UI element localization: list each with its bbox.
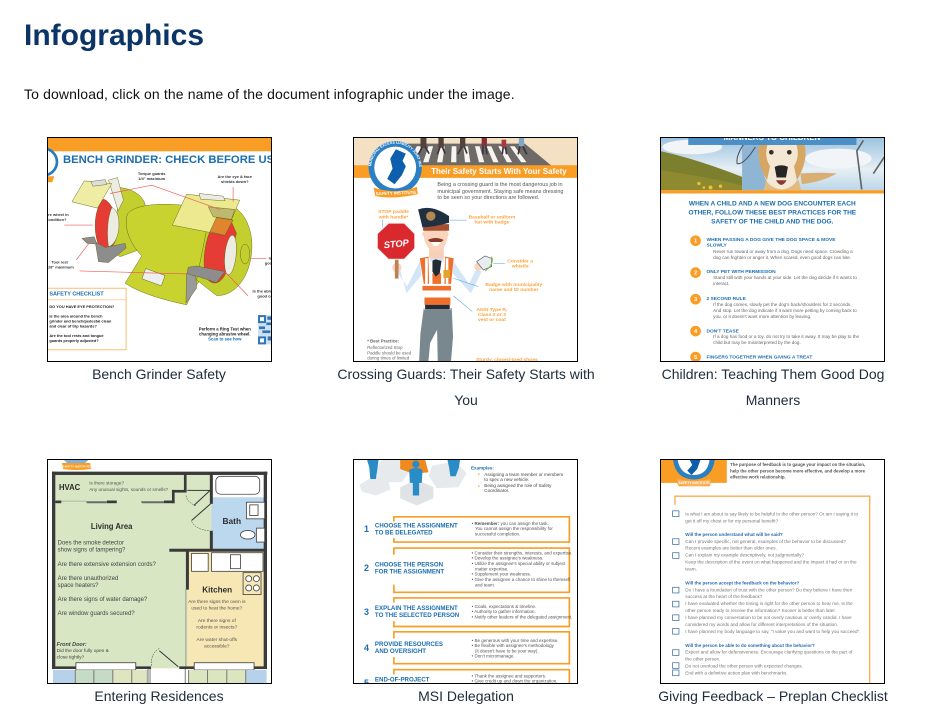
panel: crossing guards thumbnail	[353, 137, 578, 362]
panel: safety checklist: and clear of trip hazards?	[49, 323, 97, 328]
step 3: • Notify other leaders of the delegated assignment.	[472, 615, 573, 620]
step 2: • Supplement your weakness.	[472, 572, 531, 577]
ring test note: Perform a Ring Test when	[199, 326, 251, 331]
step 2: matter expertise.	[475, 566, 508, 571]
step 2: CHOOSE THE PERSON	[375, 561, 444, 568]
step 2: ONLY PET WITH PERMISSION	[707, 269, 776, 275]
caption: crossing guards: Crossing Guards: Their Safety Starts with	[337, 366, 595, 382]
living area questions: Are there extensive extension cords?	[58, 562, 157, 568]
orange header band	[48, 138, 271, 151]
step 1: WHEN PASSING A DOG GIVE THE DOG SPACE & MOVE	[707, 237, 836, 243]
panel: safety checklist: Are the tool rests and tongue	[49, 333, 104, 338]
step 4: AND OVERSIGHT	[375, 648, 426, 655]
checklist text: get it off my chest or for my personal benefit?	[685, 518, 778, 523]
logo: safety institute badge	[368, 141, 422, 198]
step 5	[364, 670, 569, 692]
step 5	[690, 352, 812, 362]
caption: crossing guards	[337, 366, 595, 408]
best practice note: Paddle should be used	[367, 350, 412, 355]
section headings	[685, 532, 815, 648]
kitchen questions	[188, 599, 246, 649]
logo: safety institute badge: SAFETY INSTITUTE	[376, 190, 416, 196]
heading: best practices: WHEN A CHILD AND A NEW DOG ENCOUNTER EACH	[689, 200, 856, 207]
caption: dog manners: Manners	[746, 392, 800, 408]
step 4: (it doesn't have to be your way).	[475, 648, 539, 653]
orange title band	[353, 165, 577, 178]
intro paragraph: Being a crossing guard is the most dangerous job in	[437, 182, 563, 188]
step 5: 5	[694, 355, 697, 361]
orange frame	[675, 496, 870, 683]
banner title	[688, 133, 856, 145]
kitchen questions: rodents or insects?	[196, 624, 238, 630]
step 1: 1	[694, 239, 697, 245]
step 3: • Authority to gather information.	[472, 609, 536, 614]
step 2: and team.	[475, 582, 495, 587]
step 2: 2	[694, 271, 697, 277]
step 2	[690, 267, 857, 286]
step 3: 2 SECOND RULE	[707, 296, 747, 302]
photo: dog and owner	[660, 138, 884, 190]
room labels: Kitchen	[202, 584, 232, 594]
orange callout labels: name and ID number	[489, 287, 538, 293]
logo on orange block	[661, 460, 727, 486]
step 3	[690, 294, 857, 319]
front door note	[57, 642, 110, 660]
step 5: • Thank the assignee and supporters.	[472, 673, 546, 678]
panel: feedback preplan checklist thumbnail	[660, 459, 885, 684]
examples list: Coordinator.	[484, 488, 509, 493]
step 4: If a dog has food or a toy, do not try to take it away. It may be play to the	[713, 334, 860, 339]
callout labels: Are the eye & face	[218, 174, 253, 179]
step 3: If the dog comes, slowly pet the dog's back/shoulders for 2 seconds.	[713, 302, 851, 307]
step 2: Stand still with your hands at your side. Let the dog decide if it wants to	[713, 275, 857, 280]
living area questions: Are there unauthorized	[58, 576, 118, 582]
step 3: And stop. Let the dog indicate if it want more petting by coming back to	[713, 308, 857, 313]
checklist text: team.	[685, 567, 697, 572]
checklist text: success at the heart of the feedback?	[685, 594, 763, 599]
ring test note: changing abrasive wheel.	[199, 331, 251, 336]
checklist text: I have planned my body language to say, "I value you and want to help you succeed".	[685, 629, 861, 634]
arms	[397, 260, 482, 293]
step 3: TO THE SELECTED PERSON	[375, 612, 460, 619]
step 1: dog can frighten or anger it. When scared, even good dogs can bite.	[713, 255, 851, 260]
panel: safety checklist	[48, 288, 126, 350]
orange callout labels: Consider a	[507, 258, 533, 264]
best practice note: during times of limited	[367, 356, 410, 361]
title: Infographics	[24, 19, 204, 52]
checklist text: Recent examples are better than older ones.	[685, 546, 777, 551]
checklist text: Can I provide specific, not general, examples of the behavior to be discussed?	[685, 539, 846, 544]
callout leader lines	[383, 219, 505, 311]
HVAC questions	[89, 481, 169, 492]
intro text: To download, click on the name of the document infographic under the image.	[24, 86, 515, 102]
section headings: Will the person understand what will be said?	[685, 532, 783, 537]
front door note: Did the door fully open &	[57, 648, 110, 654]
panel: safety checklist: SAFETY CHECKLIST	[49, 292, 104, 298]
panel: bench grinder safety thumbnail	[47, 137, 272, 362]
logo on orange block: SAFETY INSTITUTE	[678, 481, 710, 485]
checklist text: considered my words and allow for different interpretations of the situation.	[685, 622, 838, 627]
step 4: DON'T TEASE	[707, 328, 740, 334]
best practice note	[367, 339, 412, 361]
step 1: TO BE DELEGATED	[375, 529, 433, 536]
room labels	[59, 482, 241, 594]
trousers	[419, 308, 453, 361]
callout labels: Torque guards	[138, 171, 166, 176]
purpose paragraph: help the other person become more effective, and develop a more	[730, 468, 866, 473]
intro paragraph: municipal government. Staying safe means dressing	[437, 189, 563, 195]
step 2: • Consider their strengths, interests, and expertise.	[472, 550, 573, 555]
icon: whistle	[477, 256, 492, 271]
illustration: crossing guard	[392, 208, 482, 361]
section headings: Will the person accept the feedback on the behavior?	[685, 581, 799, 586]
kitchen questions: used to heat the home?	[191, 606, 243, 612]
room labels: Living Area	[91, 521, 133, 531]
intro paragraph: to be seen so your directions are followed.	[437, 195, 540, 201]
step 2: • Develop the assignee's weakness.	[472, 556, 543, 561]
icon: partial logo	[30, 149, 57, 182]
orange callout labels: Class 2 or 3	[478, 312, 506, 318]
step 4	[364, 632, 569, 664]
step 4: child but may be misinterpreted by the dog.	[713, 340, 801, 345]
purpose paragraph: The purpose of feedback is to gauge your impact on the situation,	[730, 462, 865, 467]
checklist text	[685, 512, 861, 675]
checklist text: Expect and allow for defensiveness. Encourage clarifying questions on the part of	[685, 649, 853, 654]
step 4: • Don't micromanage.	[472, 654, 515, 659]
panel: safety checklist: DO YOU HAVE EYE PROTECTION?	[49, 304, 115, 309]
HVAC questions: Any unusual sights, sounds or smells?	[89, 487, 169, 492]
checklist text: End with a definitive action plan with benchmarks.	[685, 670, 788, 675]
ring test note	[199, 326, 251, 341]
heading: their safety: Their Safety Starts With Your Safety	[431, 167, 567, 176]
head	[429, 243, 444, 258]
kitchen questions: Are there signs the oven is	[188, 599, 246, 605]
icon: QR code	[258, 315, 271, 344]
kitchen fixtures	[192, 553, 263, 595]
panel: MSI delegation thumbnail	[353, 459, 578, 684]
checklist text: I have planned my conversation to be not overly cautious or overly candid. I have	[685, 615, 852, 620]
step 2: • Give the assignee a chance to shine to themself	[472, 577, 571, 582]
living area questions: space heaters?	[58, 583, 99, 589]
step 2: interact.	[713, 281, 729, 286]
step 1: SLOWLY	[707, 243, 728, 249]
caption: giving feedback: Giving Feedback – Preplan Checklist	[658, 688, 888, 704]
callout labels: 1/4" maximum	[138, 176, 166, 181]
checklist text: Do not overload the other person with expected changes.	[685, 663, 803, 668]
step 3: 3	[364, 607, 369, 617]
caption: dog manners: Children: Teaching Them Good Dog	[662, 366, 884, 382]
heading: best practices	[689, 200, 857, 226]
illustration: grinder	[72, 178, 252, 305]
examples list: to spec a new vehicle.	[484, 477, 529, 482]
step 1: CHOOSE THE ASSIGNMENT	[375, 522, 458, 529]
step 5: FINGERS TOGETHER WHEN GIVING A TREAT	[707, 354, 812, 360]
checklist text: the other person.	[685, 656, 720, 661]
living area questions: Does the smoke detector	[58, 541, 124, 547]
callout arrows	[64, 185, 266, 296]
floor plan rooms	[54, 474, 266, 668]
panel: safety checklist: grinder and bench/pedestal clean	[49, 318, 112, 323]
callout labels: shields down?	[221, 179, 249, 184]
front door note: close tightly?	[57, 654, 85, 660]
step 4: • Be generous with your time and expertise.	[472, 638, 559, 643]
icon: stop sign: STOP	[383, 238, 410, 250]
step 1: • Remember: you can assign the task.	[472, 521, 549, 526]
caption: entering residences: Entering Residences	[94, 688, 224, 704]
step 4: PROVIDE RESOURCES	[375, 641, 443, 648]
street scene	[353, 138, 577, 166]
orange callout labels: vest or coat	[478, 317, 506, 323]
examples list	[471, 465, 564, 493]
caption: bench grinder safety: Bench Grinder Safety	[92, 366, 226, 382]
kitchen questions: Are water shut-offs	[197, 637, 238, 643]
step 3: you, or it doesn't want more attention by leaving.	[713, 314, 811, 319]
section headings: Will the person be able to do something about the behavior?	[685, 643, 815, 648]
step 1: Never run toward or away from a dog. Dogs need space. Crowding a	[713, 249, 853, 254]
examples list: Assigning a team member or members	[484, 472, 564, 477]
examples list: Being assigned the role of Safety	[484, 483, 552, 488]
orange callout labels: ANSI Type R,	[476, 307, 508, 313]
checklist text: Keep the description of the event on what happened and the impact it had or on the	[685, 560, 857, 565]
doors	[151, 491, 211, 667]
kitchen questions: accessible?	[204, 643, 230, 649]
checklist text: Do I have a foundation of trust with the other person? Do they believe I have their	[685, 587, 853, 592]
step 1: successful completion.	[475, 531, 520, 536]
step 3: 3	[694, 297, 697, 303]
step 2: • Utilize the assignee's special ability or subject	[472, 561, 566, 566]
best practice note: * Best Practice:	[367, 339, 399, 344]
illustration: people on hexagons	[359, 460, 467, 506]
orange callout labels: Badge with municipality	[485, 282, 543, 288]
caption: MSI delegation: MSI Delegation	[418, 688, 514, 704]
orange callout labels: STOP paddle	[378, 209, 409, 215]
checkboxes	[673, 511, 679, 676]
ring test note: Scan to see how	[208, 336, 242, 341]
room labels: HVAC	[59, 482, 80, 492]
orange callout labels: with handle*	[378, 214, 408, 220]
heading: best practices: OTHER, FOLLOW THESE BEST PRACTICES FOR THE	[689, 209, 857, 216]
step 4: 4	[364, 643, 369, 653]
purpose paragraph	[730, 462, 866, 480]
step 4: • Be flexible with assignee's methodology	[472, 643, 555, 648]
panel: safety checklist: Is the area around the bench	[49, 313, 103, 318]
step 2: 2	[364, 563, 369, 573]
step 3	[364, 598, 573, 627]
icon: stop sign	[377, 223, 415, 279]
floor plan walls	[52, 472, 267, 669]
orange callout labels: Baseball or uniform	[469, 214, 516, 220]
panel: entering residences thumbnail	[47, 459, 272, 684]
step 1	[690, 235, 853, 260]
best practice note: Reflectorized Stop	[367, 345, 403, 350]
step 2: FOR THE ASSIGNMENT	[375, 568, 444, 575]
living area questions: show signs of tampering?	[58, 548, 126, 554]
examples list: Examples:	[471, 465, 494, 470]
step 4: 4	[694, 329, 698, 335]
step 3: • Goals, expectations & timeline.	[472, 604, 536, 609]
checklist text: I have evaluated whether the timing is right for the other person to hear me. Is the	[685, 601, 853, 606]
orange divider band	[660, 190, 884, 194]
step 1: 1	[364, 524, 369, 534]
orange callout labels: hat with badge	[475, 219, 510, 225]
badge ribbon: SAFETY INSTITUTE	[62, 465, 90, 469]
step 2	[364, 548, 573, 592]
heading: best practices: SAFETY OF THE CHILD AND THE DOG.	[711, 219, 834, 226]
windows and exterior	[53, 663, 267, 684]
callout labels	[45, 171, 281, 299]
checklist text: other person ready to receive the information? Sooner is better than later.	[685, 608, 836, 613]
callout labels: Tool rest	[51, 259, 69, 264]
checklist text: Is what I am about to say likely to be helpful to the other person? Or am I saying it to	[685, 512, 859, 517]
living area questions: Are there signs of water damage?	[58, 597, 148, 603]
kitchen questions: Are there signs of	[198, 618, 236, 624]
living area questions	[58, 541, 157, 617]
purpose paragraph: effective work relationship.	[730, 475, 786, 480]
vest	[420, 258, 454, 310]
intro paragraph	[437, 182, 563, 201]
step 1	[364, 517, 569, 542]
step 1: You cannot assign the responsibility for	[475, 526, 553, 531]
step 4	[690, 326, 860, 345]
front door note: Front Door:	[57, 642, 87, 648]
HVAC questions: Is there storage?	[89, 481, 124, 486]
panel: dog manners thumbnail	[660, 137, 885, 362]
bathroom fixtures	[216, 476, 265, 542]
living area questions: Are window guards secured?	[58, 611, 135, 617]
checklist text: Can I explain my example descriptively, not judgmentally?	[685, 553, 805, 558]
orange callout labels	[378, 209, 543, 363]
room labels: Bath	[222, 516, 241, 526]
caption: dog manners	[662, 366, 884, 408]
badge ribbon	[62, 460, 91, 470]
orange callout labels: whistle	[511, 263, 529, 269]
step 3: EXPLAIN THE ASSIGNMENT	[375, 605, 458, 612]
panel: safety checklist: guards properly adjusted?	[49, 338, 99, 343]
caption: crossing guards: You	[454, 392, 478, 408]
